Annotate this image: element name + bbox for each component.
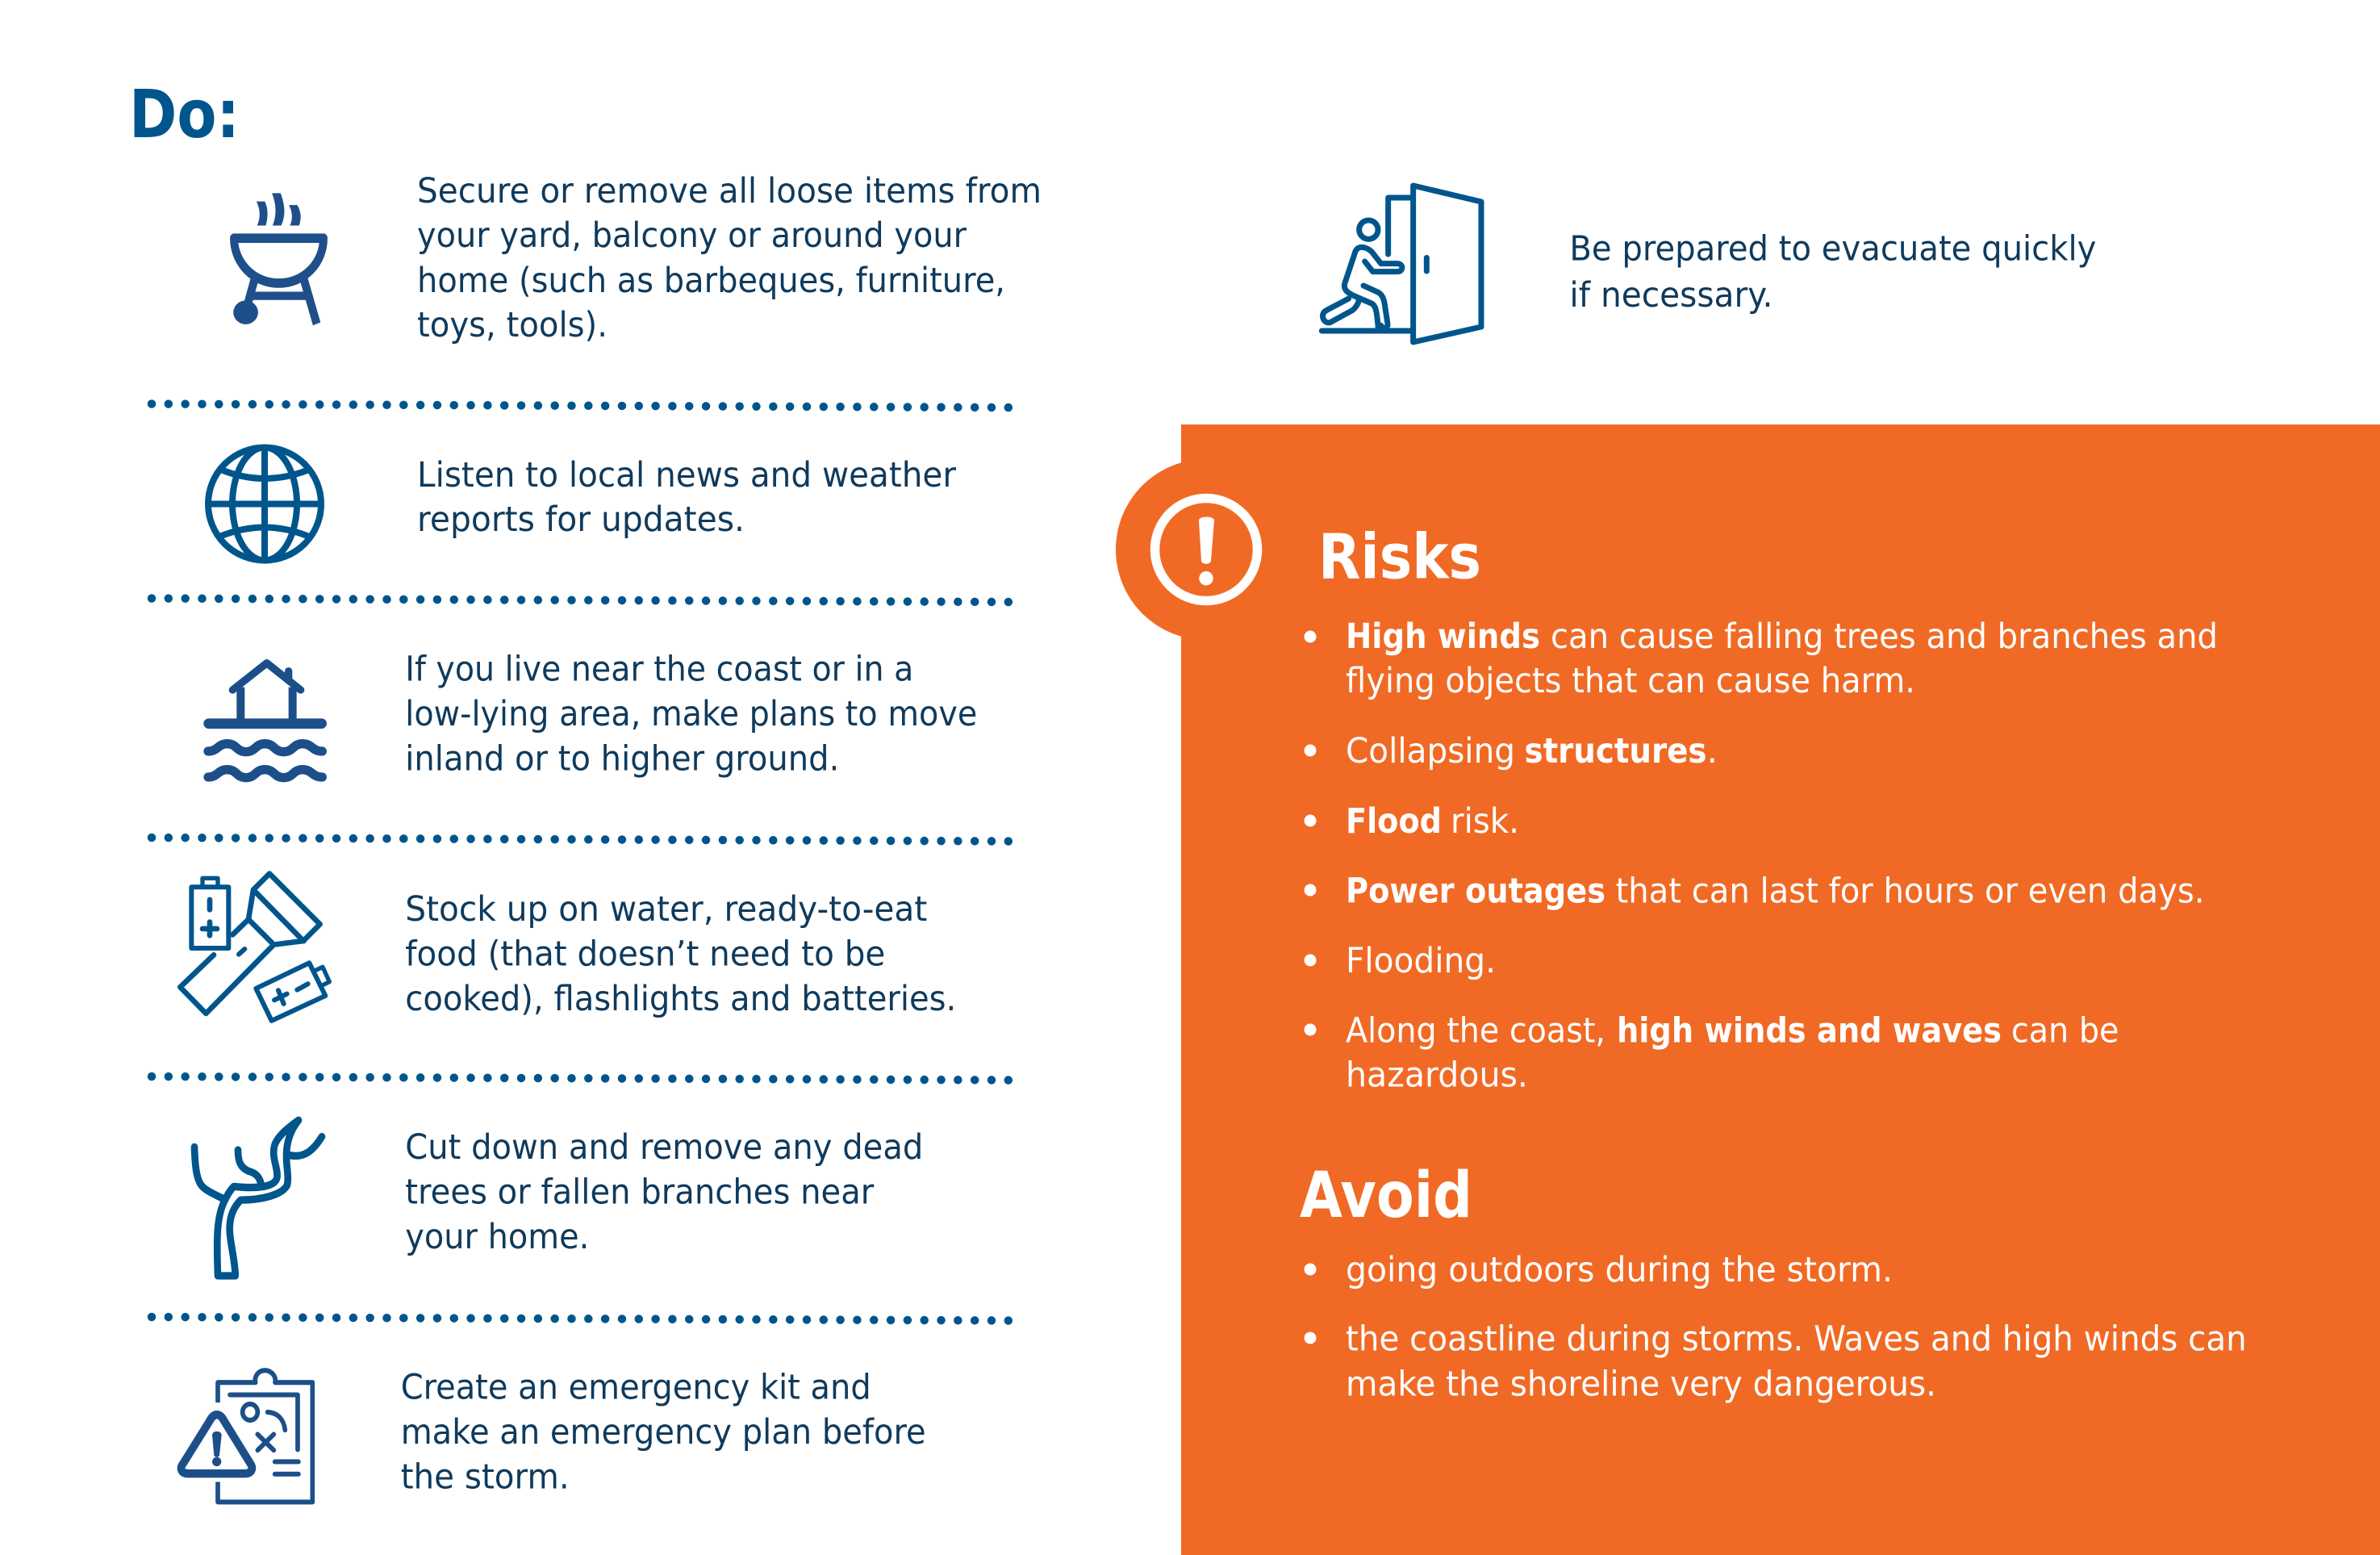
list: risks: that can last for hours or even days. [1615,872,2204,912]
icon: globe [208,447,321,561]
text: emergency kit: Create an emergency kit and [401,1367,871,1407]
text: secure loose items: toys, tools). [417,305,608,345]
list: avoid: going outdoors during the storm. [1346,1250,1893,1290]
icon: flooded house [208,663,322,778]
icon: emergency plan clipboard [182,1370,312,1502]
list: risks: hazardous. [1346,1055,1528,1096]
text: emergency kit: make an emergency plan before [401,1412,926,1453]
text: stock up: Stock up on water, ready-to-eat [405,889,927,930]
list: risks: . [1707,731,1718,771]
list: risks: high winds and waves [1617,1010,2002,1051]
list: risks: High winds [1346,617,1540,657]
heading: Risks: Risks [1318,521,1481,594]
icon: dead tree [194,1120,322,1276]
text: secure loose items: home (such as barbeques, furniture, [417,261,1005,301]
list: risks: structures [1525,731,1707,771]
text: listen to news: reports for updates. [417,500,745,540]
panel: do list [129,77,1042,1502]
text: listen to news: Listen to local news and weather [417,455,956,495]
list: risks: can cause falling trees and branches and [1551,617,2218,657]
list: risks: Along the coast, [1346,1010,1605,1051]
icon: exclamation in circle [1155,499,1257,600]
list: risks [1304,617,2218,1096]
text: move inland: If you live near the coast or in a [405,649,913,689]
text: cut down trees: your home. [405,1217,589,1257]
text: stock up [405,889,956,1019]
text: cut down trees [405,1127,923,1257]
heading: Avoid: Avoid [1300,1160,1472,1232]
text: listen to news [417,455,956,540]
panel: risks and avoid [1116,424,2380,1555]
list: risks: Collapsing [1346,731,1515,771]
text: secure loose items: Secure or remove all loose items from [417,171,1042,211]
text: stock up: cooked), flashlights and batteries. [405,979,956,1019]
list: avoid: make the shoreline very dangerous. [1346,1364,1936,1404]
text: move inland: inland or to higher ground. [405,739,839,780]
list: risks: Flood [1346,801,1442,842]
list: risks: Flooding. [1346,941,1496,981]
text: move inland: low-lying area, make plans to move [405,694,977,734]
list: avoid: the coastline during storms. Waves and high winds can [1346,1319,2247,1359]
text: be prepared to evacuate: Be prepared to evacuate quickly [1569,229,2096,270]
text: move inland [405,649,977,780]
list: risks: flying objects that can cause harm. [1346,661,1915,701]
text: secure loose items: your yard, balcony or around your [417,215,967,256]
icon: barbecue grill [233,193,324,324]
text: be prepared to evacuate [1569,229,2096,316]
text: emergency kit: the storm. [401,1457,570,1498]
list: risks: risk. [1451,801,1519,842]
icon: flashlight and batteries [180,874,329,1021]
text: be prepared to evacuate: if necessary. [1569,275,1772,316]
list: risks: can be [2011,1010,2119,1051]
list: avoid [1304,1250,2247,1404]
text: cut down trees: Cut down and remove any dead [405,1127,923,1168]
list: risks: Power outages [1346,872,1605,912]
text: secure loose items [417,171,1042,345]
icon: person running to door [1322,186,1481,342]
heading: Do: Do: [129,77,240,153]
text: cut down trees: trees or fallen branches near [405,1172,875,1212]
text: stock up: food (that doesn’t need to be [405,934,885,975]
text: emergency kit [401,1367,926,1498]
